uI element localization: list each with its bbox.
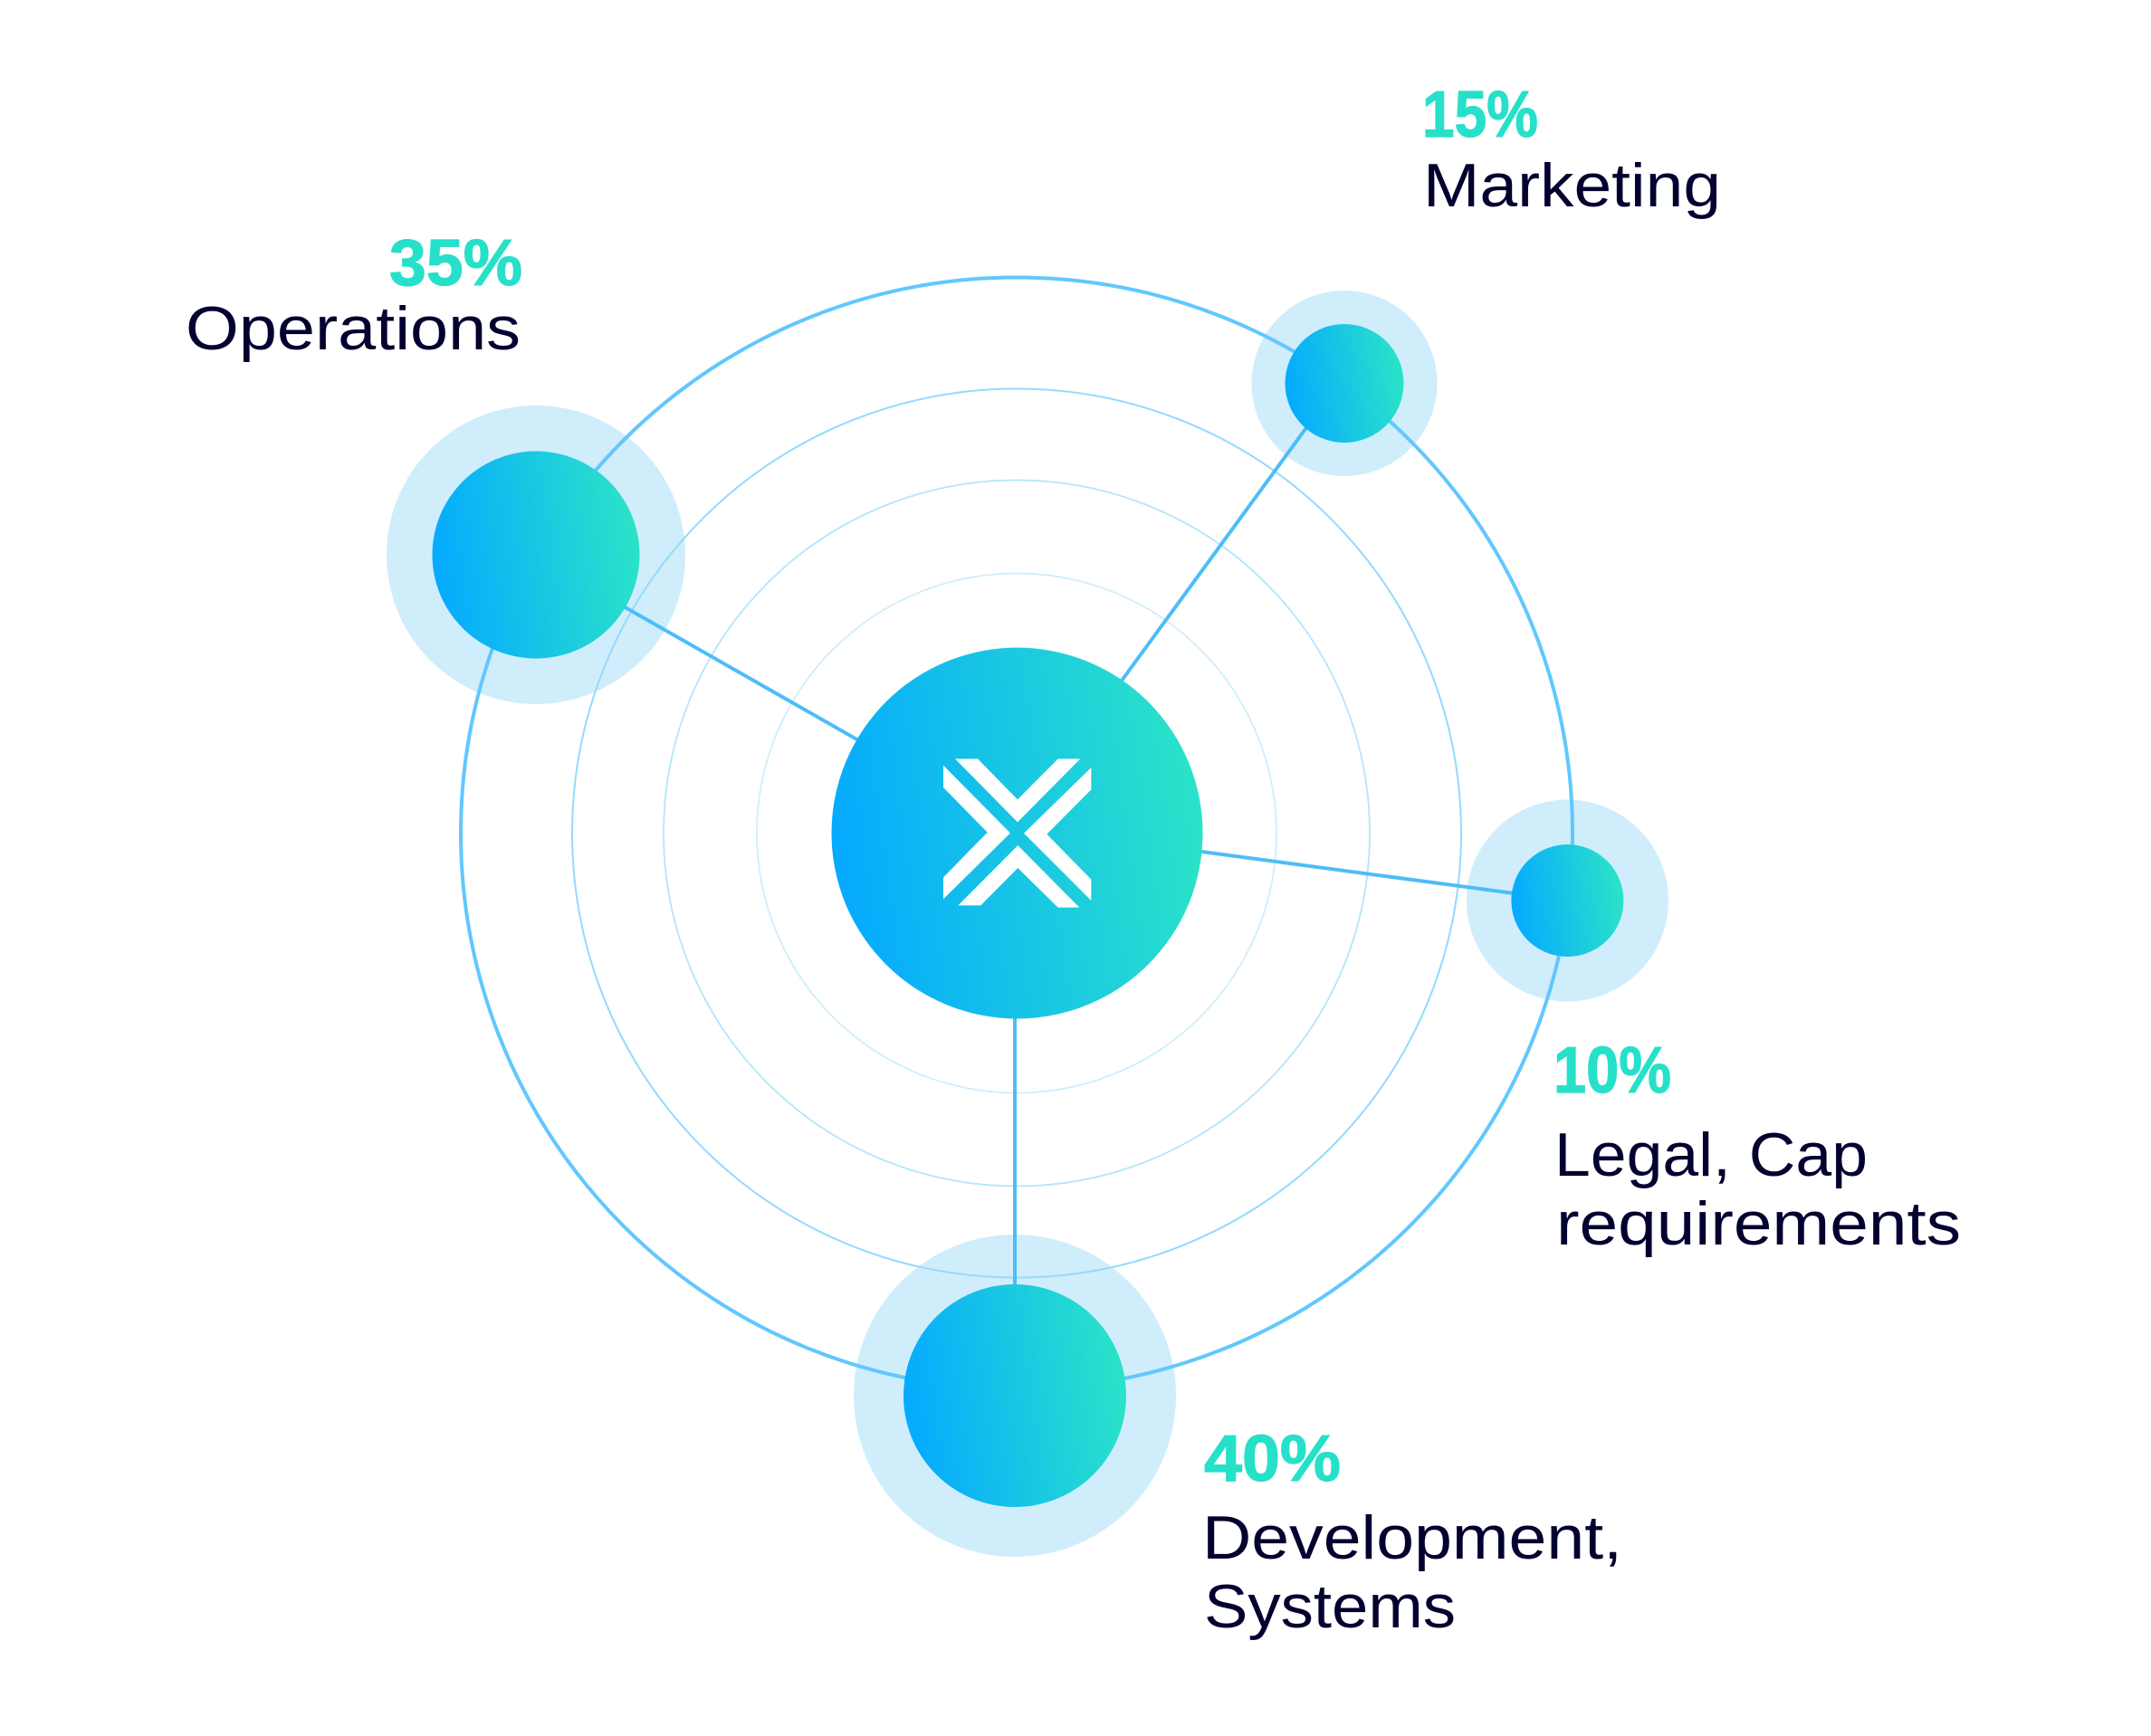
label: 40% Development, Systems: Systems <box>1204 1572 1456 1641</box>
icon: X logo <box>943 758 1091 908</box>
label: 15% Marketing <box>1422 79 1721 220</box>
label: 40% Development, Systems <box>1202 1423 1622 1641</box>
label: 10% Legal, Cap requirements: Legal, Cap <box>1554 1121 1868 1189</box>
label: 10% Legal, Cap requirements: requirements <box>1556 1189 1961 1258</box>
node: marketing <box>1286 324 1403 443</box>
label: 35% Operations: 35% <box>389 227 522 300</box>
label: 35% Operations <box>186 227 522 363</box>
central hub <box>831 648 1202 1019</box>
label: 15% Marketing: Marketing <box>1423 151 1721 220</box>
label: 40% Development, Systems: Development, <box>1202 1503 1622 1572</box>
node halos <box>387 291 1668 1557</box>
connector lines <box>616 419 1521 1290</box>
node: development <box>903 1284 1126 1507</box>
label: 40% Development, Systems: 40% <box>1204 1423 1341 1495</box>
concentric rings <box>461 277 1573 1388</box>
label: 15% Marketing: 15% <box>1422 79 1538 151</box>
label: 10% Legal, Cap requirements <box>1554 1035 1961 1258</box>
node: operations <box>433 451 639 659</box>
node: legal <box>1511 844 1623 957</box>
label: 35% Operations: Operations <box>186 294 521 363</box>
label: 10% Legal, Cap requirements: 10% <box>1554 1035 1671 1107</box>
